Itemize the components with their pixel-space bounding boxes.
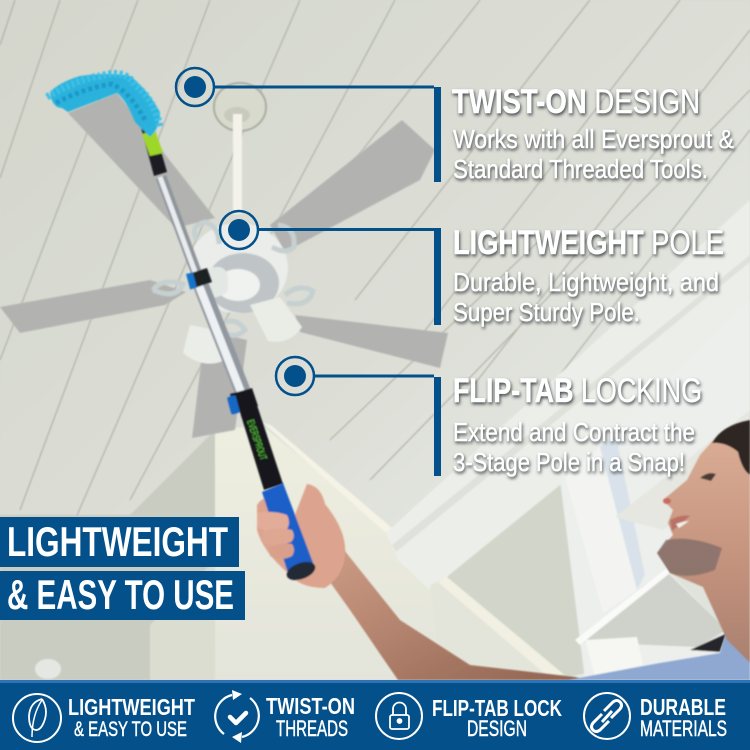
duster pole bbox=[47, 73, 283, 490]
feature: durable bbox=[584, 693, 727, 741]
banner line 1: LIGHTWEIGHT bbox=[7, 518, 228, 565]
icon: chain link bbox=[584, 693, 630, 739]
silver shaft bbox=[160, 177, 243, 392]
neck and face bbox=[657, 430, 750, 663]
description: Extend and Contract the bbox=[453, 417, 695, 447]
arm bbox=[325, 545, 590, 680]
feature: durable: DURABLE bbox=[640, 694, 726, 720]
callout: flip-tab locking bbox=[276, 357, 702, 477]
hair bbox=[712, 420, 750, 475]
hand and foam grip bbox=[257, 483, 345, 588]
smoke detector bbox=[35, 659, 61, 679]
feature: twist-on bbox=[215, 690, 355, 743]
chenille duster head bbox=[47, 73, 160, 137]
description: Standard Threaded Tools. bbox=[453, 154, 708, 184]
central cream wall bbox=[215, 425, 440, 680]
brand print on shaft: EVERSPROUT bbox=[244, 418, 268, 462]
lower wall with trim bbox=[430, 577, 580, 680]
callout marker 3 bbox=[276, 357, 441, 476]
footer bar bbox=[0, 680, 750, 750]
callout marker 1 bbox=[176, 68, 441, 182]
black lower shaft bbox=[235, 390, 283, 490]
fan canopy and rod bbox=[214, 83, 266, 214]
shirt bbox=[568, 635, 750, 680]
callout: twist-on design bbox=[176, 68, 734, 184]
hand bbox=[257, 484, 345, 588]
tool connector bbox=[139, 116, 167, 176]
mouth bbox=[670, 516, 690, 531]
description bbox=[453, 124, 734, 184]
fan blades bbox=[0, 93, 448, 438]
fingers bbox=[257, 512, 289, 532]
description: 3-Stage Pole in a Snap! bbox=[453, 447, 685, 477]
feature: lightweight: LIGHTWEIGHT bbox=[68, 694, 195, 720]
description: Super Sturdy Pole. bbox=[453, 297, 640, 327]
man reaching up bbox=[325, 420, 750, 680]
headline banner bbox=[0, 517, 245, 620]
ceiling fan bbox=[0, 83, 448, 438]
fan motor and lamps bbox=[153, 222, 313, 364]
heading: LIGHTWEIGHT POLE bbox=[453, 224, 724, 262]
icon: padlock bbox=[376, 693, 422, 739]
feature: lightweight bbox=[13, 694, 195, 742]
icon: rotating check bbox=[215, 690, 259, 743]
left dim wall bbox=[0, 430, 215, 680]
shelf unit bbox=[560, 300, 750, 680]
feature: flip-tab lock bbox=[376, 693, 562, 741]
description: Durable, Lightweight, and bbox=[453, 267, 719, 297]
banner line 2 bbox=[0, 571, 245, 620]
feature: flip-tab lock: FLIP-TAB LOCK bbox=[432, 695, 562, 721]
heading: FLIP-TAB LOCKING bbox=[453, 372, 702, 410]
banner line 2: & EASY TO USE bbox=[7, 571, 234, 618]
feature: lightweight: & EASY TO USE bbox=[74, 718, 187, 741]
feature: twist-on: THREADS bbox=[276, 716, 348, 741]
description bbox=[453, 267, 719, 327]
callout: lightweight pole bbox=[220, 211, 724, 327]
recess bbox=[447, 483, 597, 677]
description bbox=[453, 417, 695, 477]
feature: twist-on: TWIST-ON bbox=[266, 693, 355, 719]
callout marker 2 bbox=[220, 211, 441, 325]
icon: feather bbox=[13, 694, 61, 742]
eye bbox=[700, 473, 716, 481]
ceiling beam edge bbox=[262, 422, 392, 533]
lower clamp bbox=[227, 388, 258, 415]
nostril bbox=[663, 498, 671, 504]
beard shadow bbox=[657, 539, 722, 576]
feature: flip-tab lock: DESIGN bbox=[467, 716, 527, 741]
heading: TWIST-ON DESIGN bbox=[452, 83, 700, 121]
upper clamp bbox=[186, 268, 212, 290]
blue foam grip bbox=[262, 483, 315, 578]
